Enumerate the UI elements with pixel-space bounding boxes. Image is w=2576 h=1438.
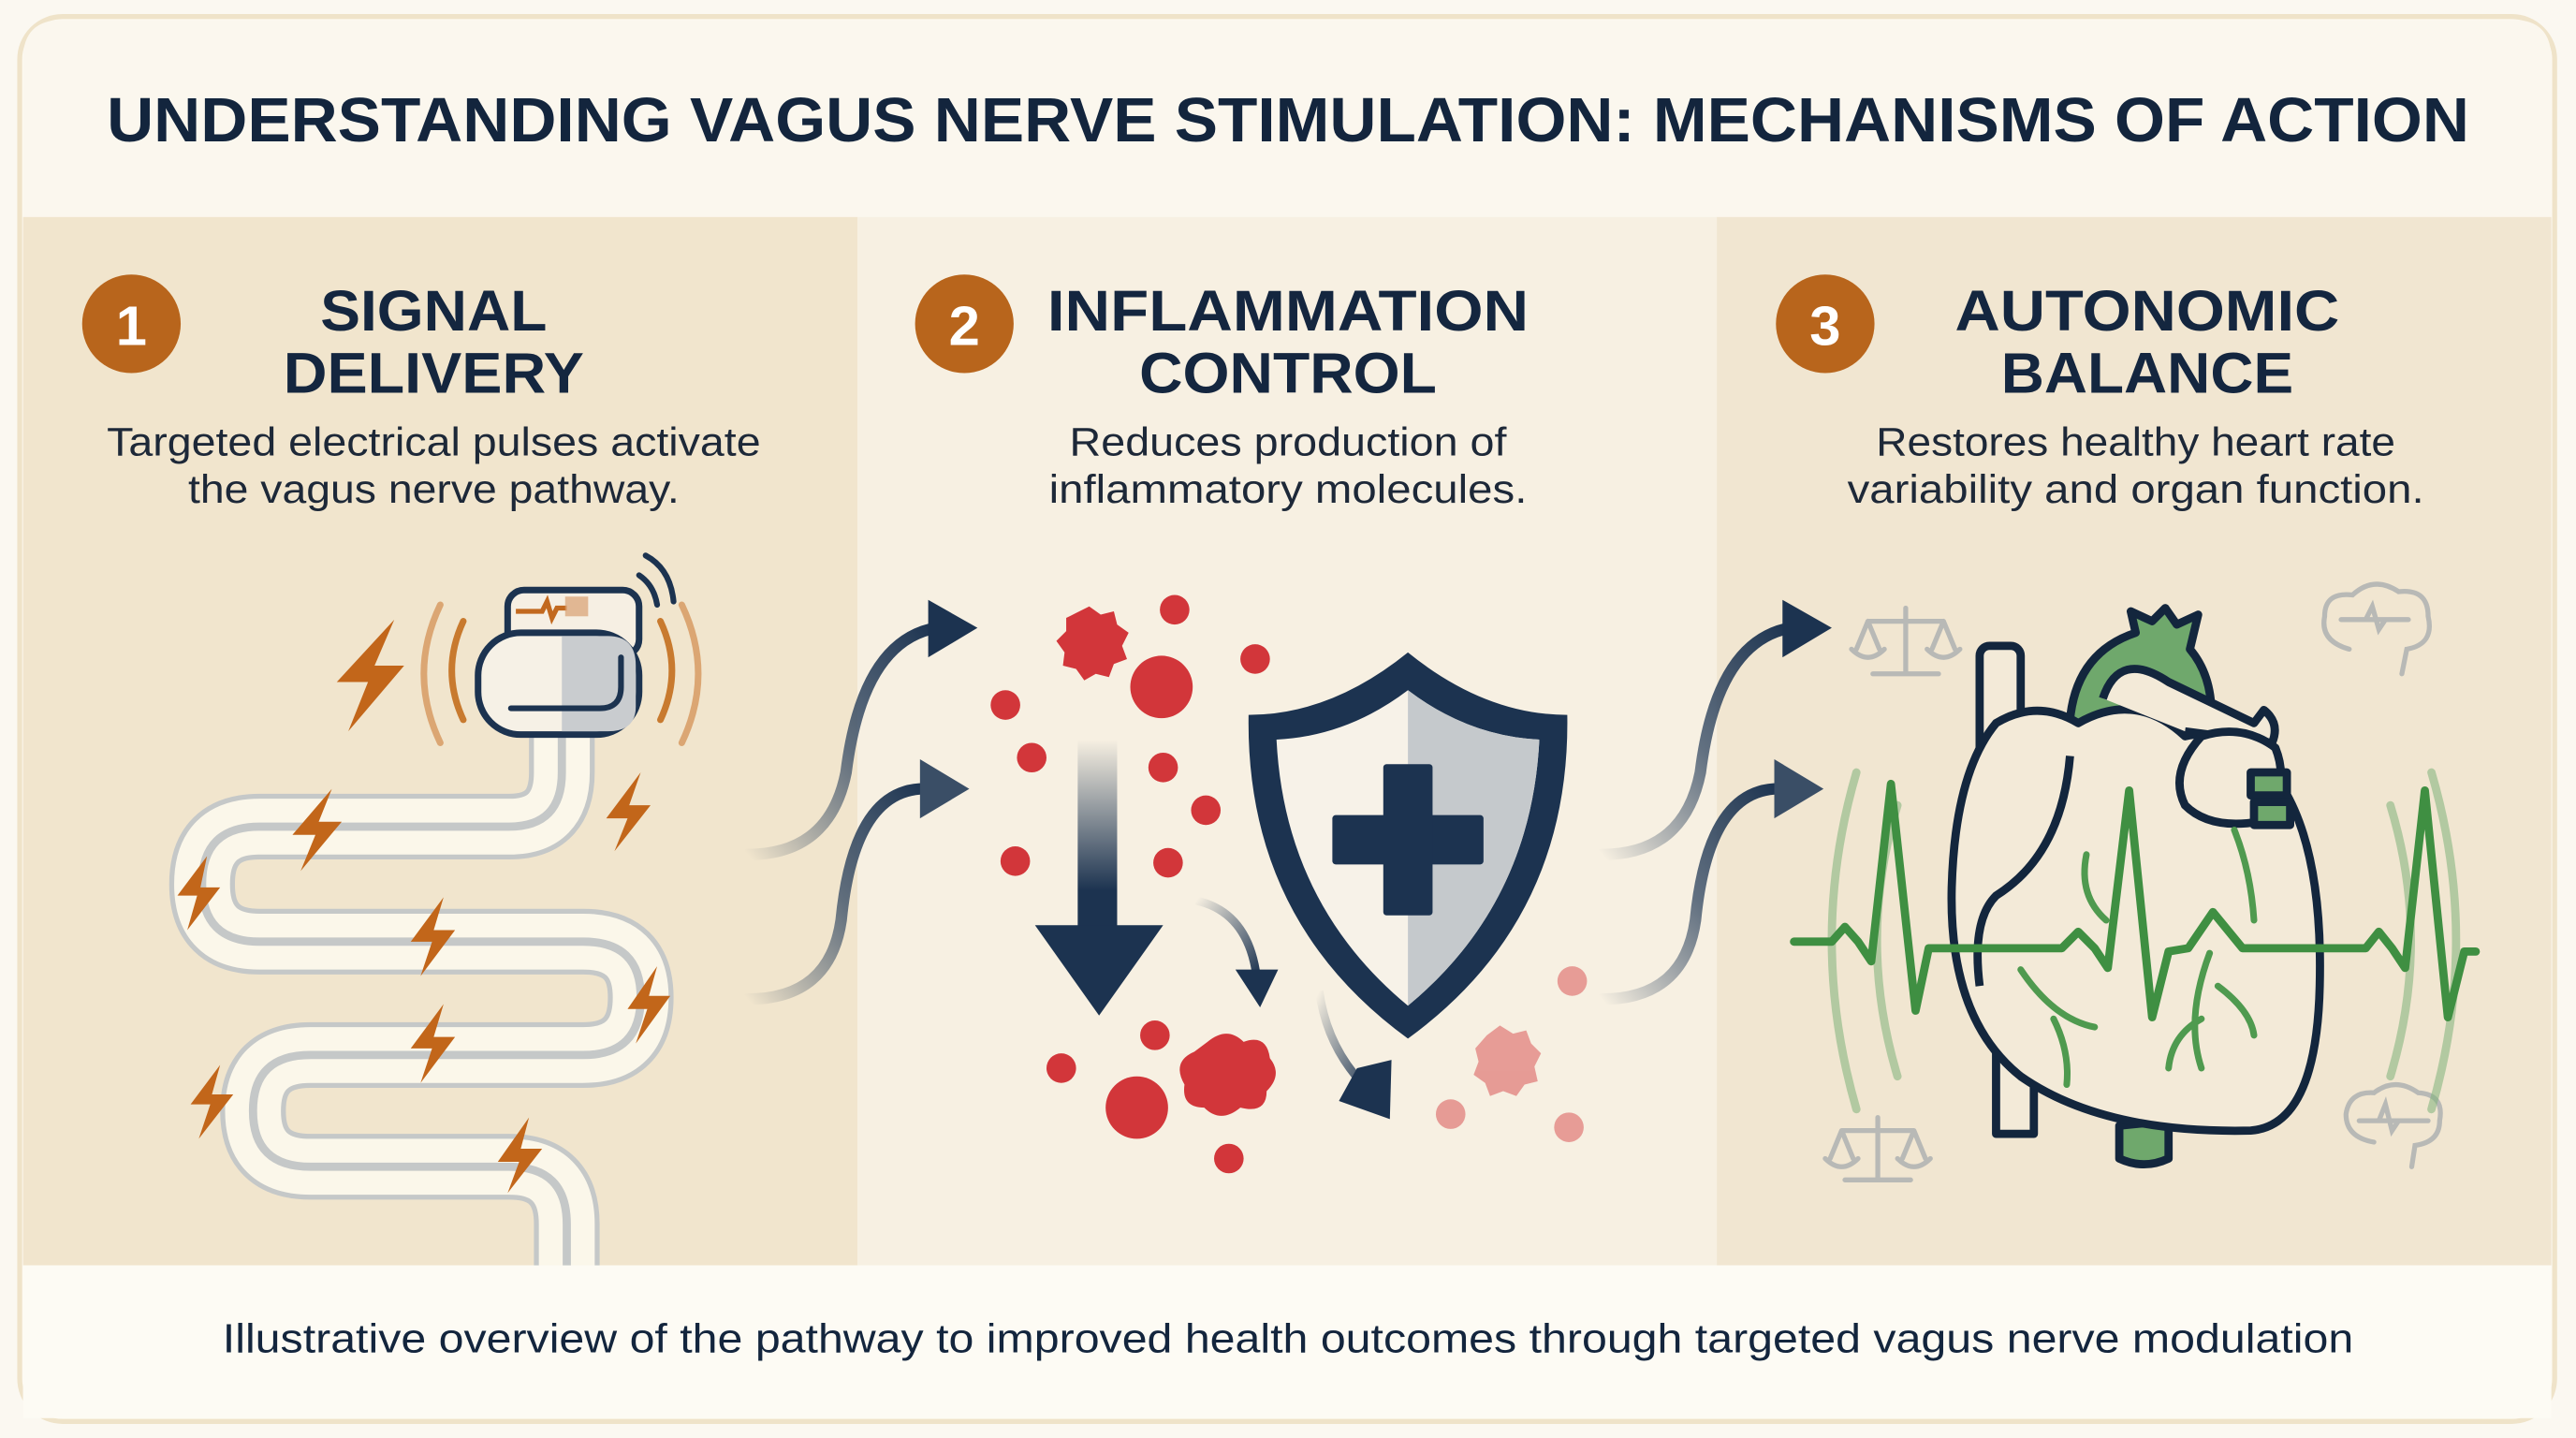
- number badge 2: 2: [949, 295, 980, 358]
- icon: heart: [1952, 609, 2320, 1165]
- footer caption: [23, 1266, 2552, 1418]
- red inflammatory molecules: [990, 594, 1276, 1173]
- text: inflammation control: inflammatory molecules.: [1049, 467, 1527, 512]
- panel: signal delivery: [23, 217, 857, 1273]
- text: inflammation control: Reduces production of: [1070, 419, 1508, 464]
- text: autonomic balance: [1848, 419, 2424, 512]
- heading: signal delivery: SIGNAL: [320, 279, 547, 344]
- heading: signal delivery: DELIVERY: [284, 342, 584, 406]
- nerve pathway: [202, 731, 640, 1273]
- footer caption: Illustrative overview of the pathway to improved health outcomes through targeted vagus nerve modulation: [223, 1316, 2353, 1362]
- ecg waves arcs: [1832, 772, 2456, 1109]
- icons: scales and brains: [1825, 584, 2440, 1180]
- text: autonomic balance: variability and organ function.: [1848, 467, 2424, 512]
- heading: autonomic balance: BALANCE: [2001, 342, 2293, 406]
- coronary vessels: [2021, 829, 2254, 1085]
- title: UNDERSTANDING VAGUS NERVE STIMULATION: MECHANISMS OF ACTION: [107, 86, 2469, 155]
- heading: inflammation control: CONTROL: [1139, 342, 1437, 406]
- text: signal delivery: the vagus nerve pathway.: [188, 467, 680, 512]
- heading: signal delivery: [284, 279, 584, 406]
- icon: shield with cross: [1249, 653, 1567, 1038]
- number badge 2: [915, 274, 1014, 374]
- icon: stimulator device: [424, 555, 698, 742]
- text: signal delivery: [107, 419, 761, 512]
- heading: autonomic balance: [1955, 279, 2339, 406]
- heading: autonomic balance: AUTONOMIC: [1955, 279, 2339, 344]
- panel: inflammation control: [748, 217, 1717, 1266]
- arrows from panel 1: [748, 600, 977, 999]
- number badge 1: [82, 274, 181, 374]
- panel: autonomic balance: [1602, 217, 2552, 1266]
- number badge 3: 3: [1809, 295, 1841, 358]
- arrow: down: [1035, 740, 1164, 1016]
- arrows from panel 2: [1602, 600, 1832, 999]
- small curved arrows: [1196, 901, 1392, 1119]
- heading: inflammation control: [1047, 279, 1529, 406]
- text: inflammation control: [1049, 419, 1527, 512]
- icons: lightning bolts: [178, 620, 670, 1193]
- heading: inflammation control: INFLAMMATION: [1047, 279, 1529, 344]
- number badge 3: [1776, 274, 1875, 374]
- number badge 1: 1: [116, 295, 147, 358]
- text: autonomic balance: Restores healthy heart rate: [1876, 419, 2395, 464]
- chart: ecg trace: [1794, 784, 2476, 1018]
- header band: [23, 20, 2552, 217]
- faded molecules: [1436, 966, 1587, 1142]
- text: signal delivery: Targeted electrical pulses activate: [107, 419, 761, 464]
